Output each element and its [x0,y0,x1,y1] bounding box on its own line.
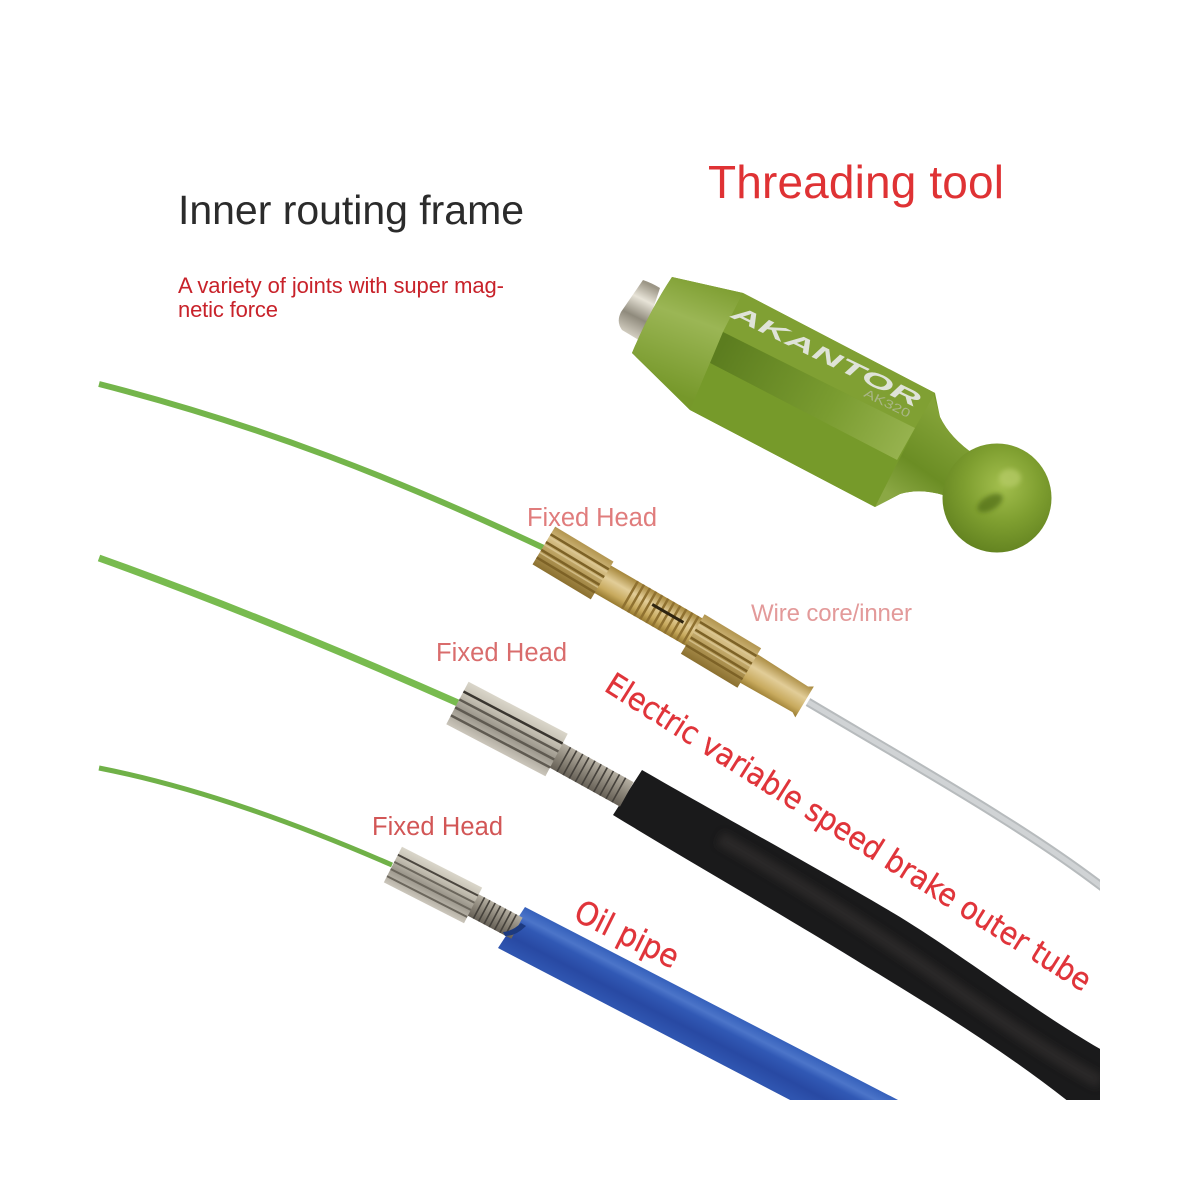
tool body base [632,277,975,507]
label: electric variable speed brake outer tube: Electric variable speed brake outer tube [599,666,1098,999]
wire: top green threading wire [99,384,548,550]
label: fixed head bottom: Fixed Head [372,813,503,841]
ball highlight [999,469,1021,487]
wire: middle green threading wire [99,558,458,703]
brass fixed head right [681,614,761,688]
heading: inner routing frame: Inner routing frame [178,187,524,233]
tool dark middle face [710,332,915,460]
brass threaded middle [589,562,705,647]
blue oil pipe [498,907,900,1101]
tool top face [723,293,935,428]
tool logo: AKANTOR [726,300,925,413]
heading: threading tool: Threading tool [708,156,1004,208]
nickel thread lower [464,892,523,939]
nickel joint with black tube [446,682,634,807]
label: wire core: Wire core/inner [751,600,912,627]
text block: joints description: netic force [178,297,278,322]
black outer tube [613,770,1102,1102]
label: fixed head top: Fixed Head [527,504,657,532]
wire: bottom green threading wire [99,768,392,865]
tool ball [942,444,1052,552]
nickel joint with blue pipe [384,847,526,939]
blue pipe notch [503,923,526,936]
tool neck [875,393,975,507]
tool model number: AK320 [862,386,913,421]
ball shadow [974,490,1006,516]
tool lower face [690,363,897,507]
brass joint [533,527,814,717]
tool front taper [632,277,743,410]
text block: joints description: A variety of joints with super mag- [178,273,504,298]
text block: joints description [178,273,504,322]
nickel fixed head lower [384,847,482,923]
wire core: grey inner [808,702,1105,889]
label: oil pipe: Oil pipe [568,892,686,976]
nickel fixed head middle [446,682,568,776]
icon: threading tool [619,277,1052,552]
label: fixed head middle: Fixed Head [436,639,567,667]
brass fixed head left [533,527,613,599]
brass end ferrule [730,647,814,717]
silver tip [619,280,660,342]
nickel thread middle [546,741,634,807]
